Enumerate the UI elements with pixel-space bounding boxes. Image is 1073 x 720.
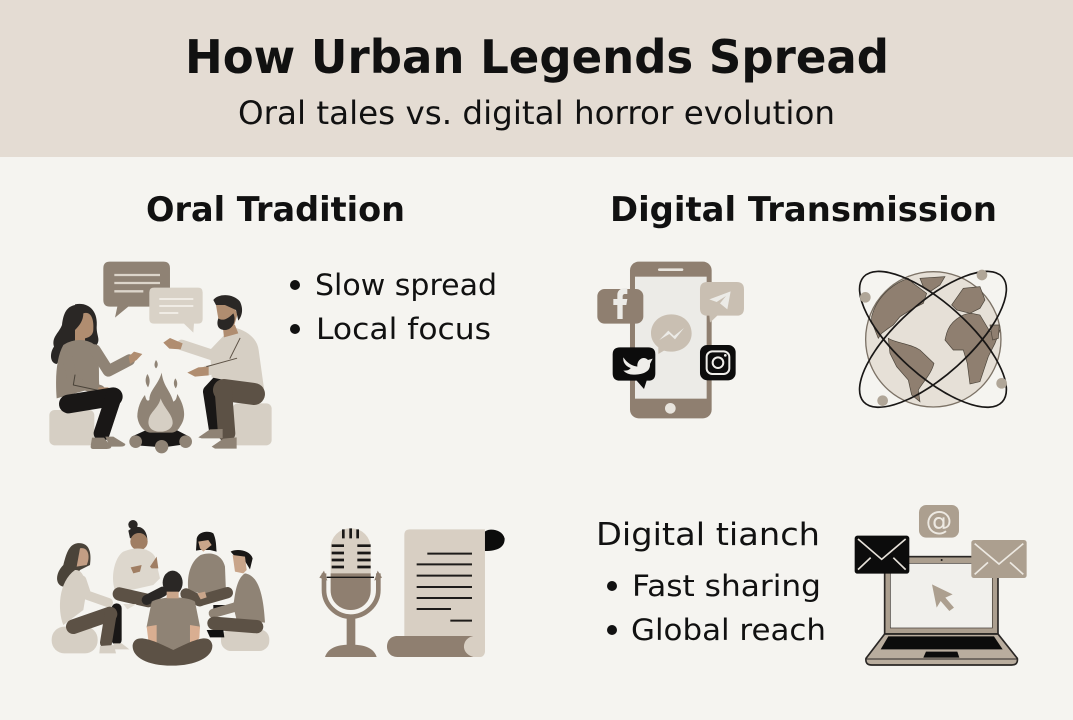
phone: [630, 262, 712, 418]
person center: [133, 571, 212, 666]
icon: at sign: [919, 505, 959, 538]
laptop: [866, 557, 1017, 665]
subtitle: Oral tales vs. digital horror evolution: [238, 94, 835, 132]
heading: digital tianch: Digital tianch: [596, 517, 820, 553]
illustration: scroll: [387, 529, 505, 657]
icon: twitter: [613, 347, 655, 389]
icon: black envelope: [855, 536, 909, 574]
illustration: laptop with email: [855, 505, 1027, 665]
seat right: [233, 403, 272, 445]
seats: [52, 627, 269, 653]
globe: [840, 250, 1026, 429]
icon: facebook: [597, 288, 643, 324]
speech bubble dark: [103, 262, 170, 318]
person left: [57, 543, 129, 653]
icon: at sign: @: [926, 506, 952, 537]
icon: instagram: [700, 345, 736, 380]
person top-left: [113, 520, 163, 609]
seat left: [49, 410, 94, 445]
continents: [872, 277, 1000, 402]
campfire: [129, 360, 192, 453]
icon: tan envelope: [971, 540, 1027, 578]
icon: messenger: [651, 314, 692, 354]
bullet list: oral: [290, 268, 497, 346]
person right: [207, 550, 265, 637]
bullet list: digital: Fast sharing: [632, 569, 821, 603]
man: [163, 295, 264, 449]
icon: telegram: [700, 282, 744, 323]
woman: [51, 304, 142, 449]
speech bubble light: [149, 288, 203, 333]
illustration: microphone: [319, 528, 382, 657]
heading: digital transmission: Digital Transmission: [610, 190, 997, 230]
header band: [0, 0, 1073, 157]
orbits: [840, 250, 1026, 429]
bullet list: oral: Slow spread: [315, 268, 497, 302]
illustration: smartphone with social apps: [597, 250, 1026, 429]
title: How Urban Legends Spread: [185, 30, 889, 84]
illustration: campfire conversation: [49, 262, 272, 453]
bullet list: digital: Global reach: [631, 613, 826, 647]
illustration: story circle: [52, 520, 269, 666]
bullet list: oral: Local focus: [316, 312, 491, 346]
heading: oral tradition: Oral Tradition: [146, 190, 405, 230]
icon: cursor: [932, 584, 954, 611]
person top-right: [186, 532, 227, 609]
bullet list: digital: [607, 569, 826, 647]
